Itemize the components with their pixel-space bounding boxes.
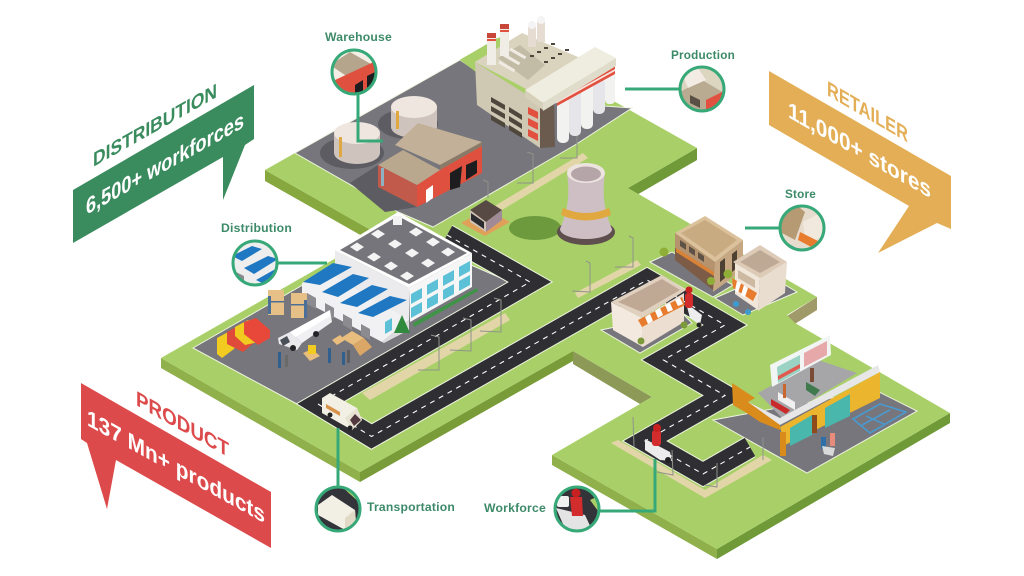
- silos: [557, 66, 615, 143]
- callout: transportation: [314, 428, 455, 533]
- delivery van: [322, 393, 362, 430]
- building: striped-awning shop: [611, 275, 688, 347]
- yard: containers: [217, 318, 270, 358]
- workforce label: Workforce: [484, 503, 546, 515]
- workforce ring: [555, 487, 599, 531]
- store lots: [601, 252, 917, 473]
- production thumbnail: [682, 68, 722, 110]
- production ring: [680, 67, 724, 111]
- parking bays: [853, 404, 906, 433]
- store label: Store: [785, 189, 816, 201]
- building: storage tanks: [320, 96, 438, 169]
- warehouse label: Warehouse: [325, 32, 392, 44]
- shoppers: [821, 437, 826, 449]
- building: gatehouse: [461, 200, 510, 236]
- building: factory: [460, 16, 616, 148]
- banner: retailer: [769, 71, 951, 253]
- storefront: [780, 372, 880, 445]
- callout: warehouse: [325, 32, 392, 141]
- rider: lower scooter: [645, 424, 672, 463]
- stat: workforces: 6,500+ workforces: [86, 107, 244, 221]
- skylights: [350, 216, 455, 280]
- street lamps: [418, 126, 763, 487]
- isometric map: [161, 16, 950, 559]
- workforce thumbnail: [556, 488, 598, 530]
- road: [318, 235, 750, 474]
- shrubs: [660, 248, 668, 256]
- glass windows: [385, 261, 470, 334]
- building: tan two-storey store: [660, 216, 743, 292]
- yard: truck: [278, 310, 332, 351]
- distribution label: Distribution: [221, 223, 292, 235]
- production label: Production: [671, 50, 735, 62]
- transportation thumbnail: [318, 488, 358, 530]
- distribution lot: [193, 232, 510, 404]
- building: supermarket: [732, 335, 880, 456]
- billboard: [770, 335, 831, 387]
- banner: product: [81, 383, 271, 548]
- store ring: [780, 206, 824, 250]
- shelves and counter: [778, 392, 795, 410]
- stat: stores: 11,000+ stores: [788, 98, 931, 204]
- land sides: [161, 148, 950, 559]
- callout: production: [625, 50, 735, 113]
- roof vents: [530, 43, 569, 63]
- building: corner store: [732, 245, 787, 315]
- dock doors: [307, 293, 370, 340]
- transportation ring: [316, 487, 360, 531]
- callout: distribution: [221, 223, 327, 287]
- building: distribution centre: [302, 212, 478, 343]
- hedge and tree: [413, 288, 478, 327]
- heading: distribution: DISTRIBUTION: [93, 79, 217, 172]
- store thumbnail: [782, 208, 822, 248]
- warehouse thumbnail: [334, 52, 374, 92]
- warehouse lot: [295, 60, 632, 227]
- callout: workforce: [484, 459, 655, 533]
- distribution thumbnail: [234, 242, 276, 284]
- transportation label: Transportation: [367, 502, 455, 514]
- blue roofs: [303, 263, 407, 317]
- yard: racks: [268, 290, 307, 318]
- distribution ring: [233, 241, 277, 285]
- banner: distribution: [73, 79, 254, 243]
- rider: upper scooter: [685, 286, 702, 328]
- chimneys: [487, 16, 545, 65]
- callout: store: [745, 189, 826, 252]
- yard: boxes and workers: [278, 331, 372, 368]
- warehouse ring: [332, 50, 376, 94]
- heading: retailer: RETAILER: [827, 76, 908, 147]
- land top surface: [161, 37, 950, 549]
- stat: products: 137 Mn+ products: [87, 405, 265, 529]
- building: red warehouse: [350, 123, 482, 212]
- heading: product: PRODUCT: [136, 386, 229, 462]
- sand paths: [362, 153, 772, 498]
- building: cooling tower: [509, 163, 615, 245]
